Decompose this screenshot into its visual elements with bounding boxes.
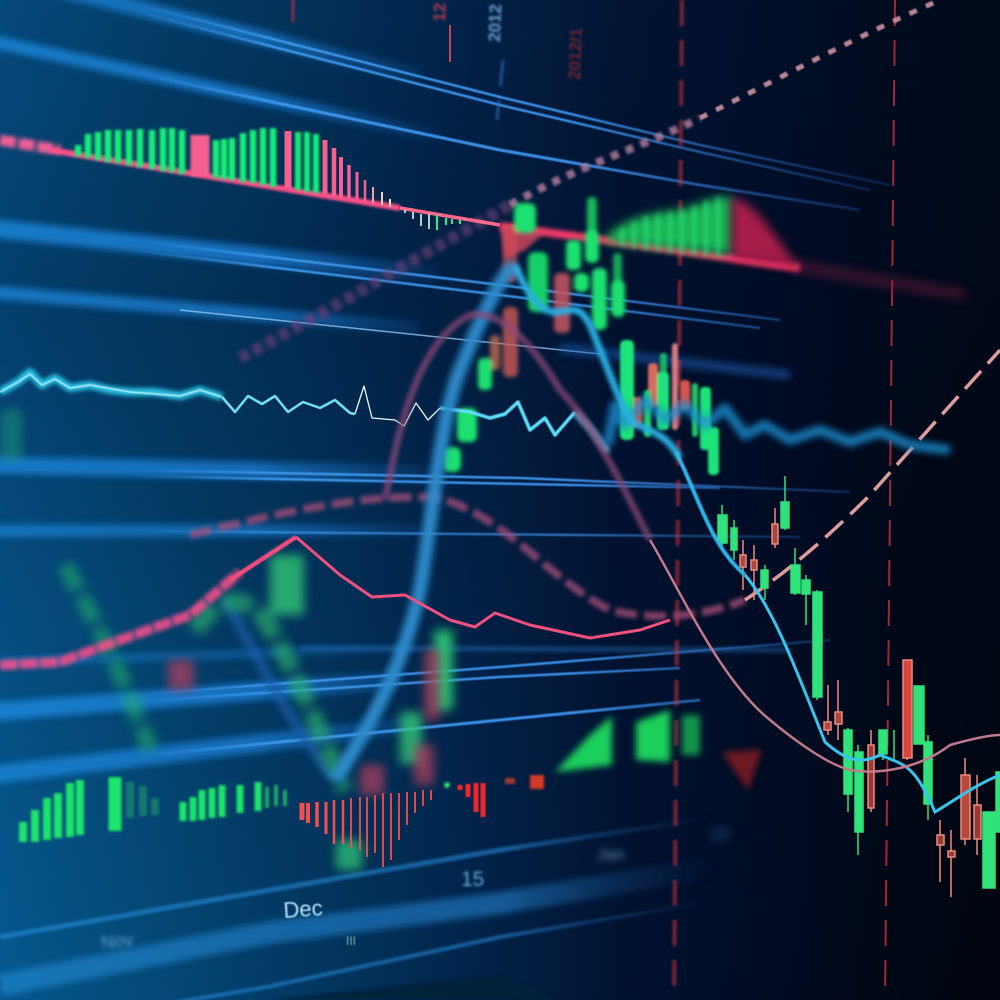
candlesticks: lower right cluster xyxy=(844,660,1000,897)
pink fade: top histogram tail xyxy=(790,265,965,295)
axis labels: blurred top: 12 xyxy=(430,3,450,22)
label: 15: 15 xyxy=(461,868,484,891)
histogram: bottom small marks xyxy=(444,775,544,789)
pink baseline: top histogram right xyxy=(500,226,800,268)
histogram: right green blurred humps xyxy=(555,710,700,772)
red candles: blurred lower xyxy=(168,650,440,795)
pink blocks xyxy=(200,131,390,207)
candlesticks: upper cluster xyxy=(443,197,625,472)
green candles: blurred lower left xyxy=(0,410,453,870)
dashed pink moving average: top right curve xyxy=(240,0,940,358)
axis labels: bottom xyxy=(100,825,729,953)
cyan oscillator line xyxy=(0,372,950,452)
label: Nov: Nov xyxy=(100,930,134,953)
histogram: far right red blurred xyxy=(722,750,762,790)
label: Jan: Jan xyxy=(597,845,624,864)
histogram: bottom red bars xyxy=(302,790,431,867)
green bars xyxy=(78,128,316,193)
histogram: top MACD bars xyxy=(0,128,500,230)
dashed salmon moving average: lower curve xyxy=(190,350,1000,616)
histogram: bottom small red block xyxy=(460,783,483,817)
thick blue moving average xyxy=(335,265,1000,812)
axis labels: blurred top: 2012 xyxy=(485,4,505,42)
red hump: top histogram right xyxy=(732,197,800,268)
candlesticks: mid cluster xyxy=(620,340,719,475)
axis labels: blurred top: 2012/1 xyxy=(565,28,586,80)
vertical marker lines: red dashed xyxy=(293,0,895,1000)
stripes on green hump xyxy=(622,197,718,257)
label: tick far: 15 xyxy=(710,825,729,844)
label: Dec: Dec xyxy=(283,895,323,923)
pink baseline xyxy=(0,140,60,150)
axis labels: blurred top xyxy=(430,3,586,80)
histogram: bottom left green bars xyxy=(23,777,285,842)
small ticks below baseline xyxy=(405,210,460,230)
candlesticks: sharp cluster xyxy=(718,476,842,740)
scroll bar: dark lower strip xyxy=(265,975,560,1000)
blue arc: blurred lower left xyxy=(225,600,335,780)
red bars: below baseline near peak xyxy=(500,226,545,258)
label: III on scroll bar: III xyxy=(346,934,356,948)
green hump: top histogram right xyxy=(605,197,732,254)
thin mauve moving average xyxy=(385,314,1000,772)
pink moving average xyxy=(0,537,670,665)
